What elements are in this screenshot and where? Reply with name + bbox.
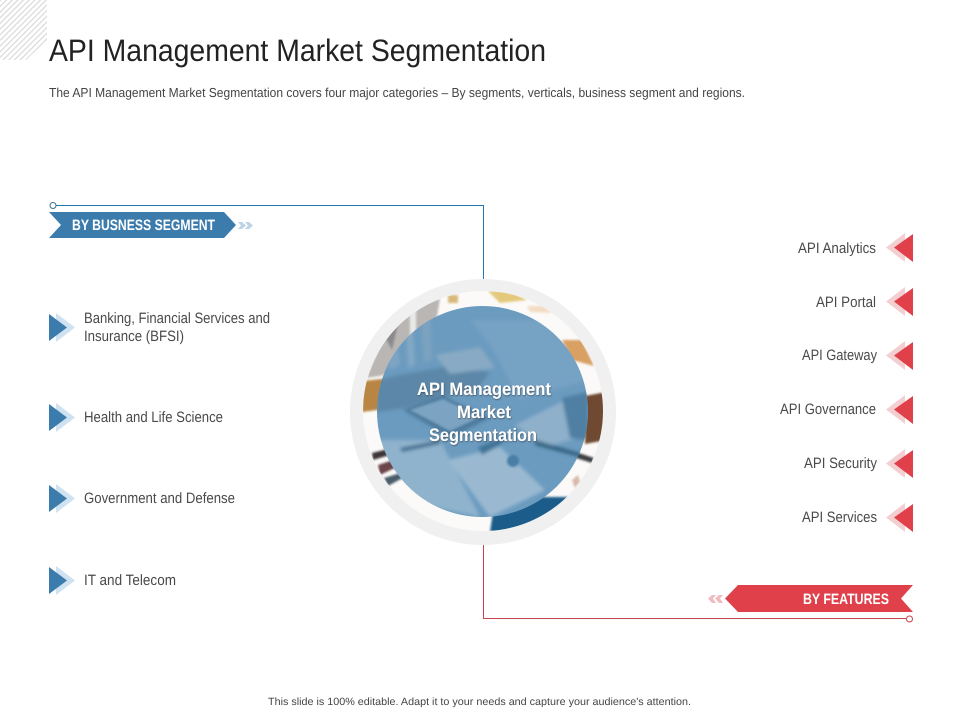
- connector: features: [484, 545, 912, 622]
- item: governance: [780, 395, 913, 424]
- item: government: Government and Defense: [84, 490, 235, 507]
- item: analytics: [798, 233, 913, 262]
- center label: Segmentation: [429, 425, 537, 445]
- title: API Management Market Segmentation: [49, 33, 546, 68]
- item: security: API Security: [804, 455, 877, 472]
- item: BFSI: [49, 310, 270, 345]
- blue overlay: [377, 306, 588, 517]
- item: IT: IT and Telecom: [84, 572, 176, 589]
- item: analytics: API Analytics: [798, 240, 876, 257]
- item: gateway: [802, 341, 913, 370]
- item: portal: [816, 287, 913, 316]
- item: BFSI: Insurance (BFSI): [84, 328, 184, 345]
- item: services: [802, 503, 913, 532]
- connector: business segment: [50, 202, 484, 279]
- list: features: [780, 233, 913, 532]
- list: business segments: [49, 310, 270, 595]
- photo: [360, 288, 606, 534]
- item: health: Health and Life Science: [84, 409, 223, 426]
- banner: by features: [708, 585, 913, 612]
- center label: Market: [457, 402, 511, 422]
- subtitle: The API Management Market Segmentation covers four major categories – By segments, verticals, business segment and regions.: [49, 85, 745, 100]
- center label: [417, 379, 551, 445]
- item: portal: API Portal: [816, 294, 876, 311]
- banner: by business segment: BY BUSNESS SEGMENT: [72, 217, 215, 234]
- item: gateway: API Gateway: [802, 347, 877, 364]
- center circle: [350, 279, 616, 545]
- item: IT: [49, 566, 176, 595]
- item: BFSI: Banking, Financial Services and: [84, 310, 270, 327]
- banner: by business segment: [49, 212, 253, 238]
- banner: by features: BY FEATURES: [803, 591, 889, 608]
- item: security: [804, 449, 913, 478]
- center label: API Management: [417, 379, 551, 399]
- item: services: API Services: [802, 509, 877, 526]
- item: government: [49, 484, 235, 513]
- photo detail under tint: [377, 306, 590, 517]
- footer note: This slide is 100% editable. Adapt it to your needs and capture your audience's attention.: [268, 696, 691, 708]
- item: health: [49, 403, 223, 432]
- item: governance: API Governance: [780, 401, 876, 418]
